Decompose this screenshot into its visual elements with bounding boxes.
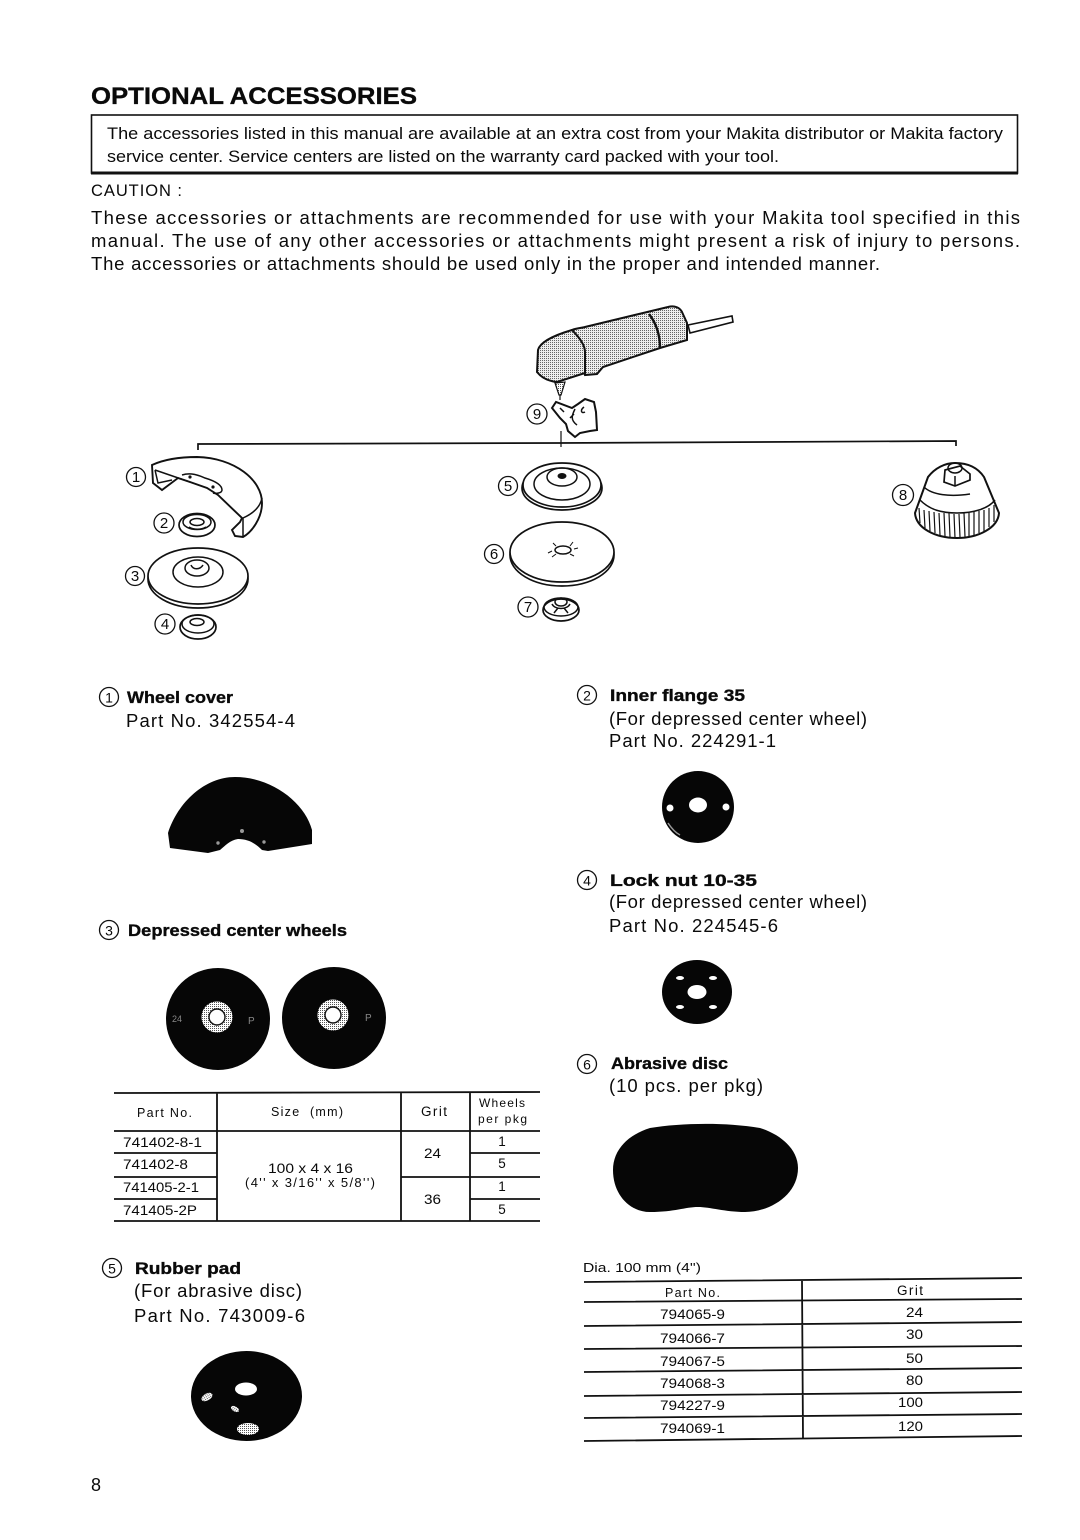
caution text — [91, 207, 1020, 274]
part 8: wire cup brush: 8 — [899, 487, 907, 504]
part 7: lock nut: 7 — [524, 599, 532, 616]
item: rubber pad: Rubber pad — [135, 1260, 241, 1278]
photo: inner flange — [662, 771, 734, 843]
photo: depressed center wheels: P — [365, 1013, 372, 1024]
part 6: abrasive disc: 6 — [490, 546, 498, 563]
marker 6 — [578, 1054, 596, 1074]
caution heading: CAUTION : — [91, 182, 182, 200]
notice box — [91, 115, 1018, 173]
table: abrasive discs: 794066-7 — [660, 1331, 725, 1346]
icon: angle grinder tool — [537, 306, 733, 400]
marker 3 — [100, 920, 118, 940]
item: abrasive disc — [578, 1054, 763, 1096]
table: depressed center wheels: 741405-2P — [123, 1203, 197, 1218]
item: inner flange: (For depressed center wheel) — [609, 708, 867, 729]
table: abrasive discs: 30 — [906, 1326, 923, 1342]
table: abrasive discs: 794069-1 — [660, 1421, 725, 1436]
photo: depressed center wheels — [166, 967, 386, 1070]
table: depressed center wheels: 1 — [498, 1134, 506, 1149]
table: depressed center wheels: 36 — [424, 1191, 441, 1207]
marker 4: 4 — [583, 872, 591, 888]
table: depressed center wheels: Part No. — [137, 1106, 192, 1120]
table: abrasive discs — [584, 1278, 1022, 1441]
part 9: flange piece: 9 — [533, 406, 541, 423]
table: depressed center wheels: 1 — [498, 1179, 506, 1194]
table: abrasive discs: 794065-9 — [660, 1307, 725, 1322]
item: inner flange: Part No. 224291-1 — [609, 730, 776, 751]
marker 3: 3 — [105, 922, 113, 938]
item: inner flange — [578, 686, 867, 751]
item: abrasive disc: Abrasive disc — [611, 1055, 728, 1073]
part 3: depressed center wheel: 3 — [131, 568, 139, 585]
item: wheel cover — [100, 688, 295, 731]
photo: depressed center wheels: 24 — [172, 1014, 182, 1024]
item: rubber pad — [102, 1258, 305, 1326]
table: depressed center wheels: 100 x 4 x 16 — [268, 1161, 353, 1176]
item: depressed center wheels: Depressed center wheels — [128, 922, 347, 940]
item: wheel cover: Wheel cover — [127, 689, 234, 707]
marker 5: 5 — [108, 1260, 116, 1276]
notice box: service center. Service centers are listed on the warranty card packed with your tool. — [107, 147, 779, 166]
photo: rubber pad — [191, 1351, 302, 1441]
table: depressed center wheels: 741402-8-1 — [123, 1135, 202, 1150]
part 6: abrasive disc — [484, 522, 614, 586]
connector line — [198, 431, 956, 450]
photo: lock nut — [662, 960, 732, 1024]
marker 1 — [100, 688, 118, 706]
photo: wheel cover — [168, 777, 312, 853]
table: depressed center wheels: per pkg — [478, 1112, 527, 1126]
table: depressed center wheels: Grit — [421, 1104, 447, 1119]
label: disc diameter: Dia. 100 mm (4'') — [583, 1261, 701, 1275]
table: abrasive discs: 50 — [906, 1350, 923, 1366]
part 5: rubber pad — [498, 463, 602, 510]
table: abrasive discs: 120 — [898, 1418, 923, 1434]
marker 2: 2 — [583, 688, 591, 704]
item: lock nut — [578, 870, 867, 936]
item: wheel cover: Part No. 342554-4 — [126, 710, 295, 731]
notice box: The accessories listed in this manual are available at an extra cost from your Makita distributor or Makita factory — [107, 124, 1004, 143]
part 3: depressed center wheel — [126, 548, 248, 608]
table: abrasive discs: 794068-3 — [660, 1376, 725, 1391]
marker 2 — [578, 686, 596, 704]
table: abrasive discs: Part No. — [665, 1286, 720, 1300]
item: rubber pad: Part No. 743009-6 — [134, 1305, 305, 1326]
part 9: flange piece — [527, 399, 597, 437]
title: OPTIONAL ACCESSORIES — [91, 83, 417, 110]
part 1: wheel cover: 1 — [132, 469, 140, 486]
table: depressed center wheels: (4'' x 3/16'' x 5/8'') — [245, 1175, 375, 1190]
photo: abrasive discs — [613, 1124, 798, 1212]
table: depressed center wheels: Size (mm) — [271, 1105, 343, 1119]
page number: 8 — [91, 1475, 101, 1495]
photo: depressed center wheels: P — [248, 1016, 255, 1027]
exploded parts diagram — [126, 306, 999, 639]
part 2: inner flange — [154, 513, 215, 536]
table: abrasive discs: 24 — [906, 1304, 923, 1320]
table: depressed center wheels: 24 — [424, 1145, 441, 1161]
marker 1: 1 — [105, 690, 113, 706]
table: depressed center wheels: 741405-2-1 — [123, 1180, 199, 1195]
table: abrasive discs: 80 — [906, 1372, 923, 1388]
part 2: inner flange: 2 — [160, 515, 168, 532]
item: lock nut: Part No. 224545-6 — [609, 915, 778, 936]
table: depressed center wheels: 5 — [498, 1202, 506, 1217]
part 4: lock nut — [155, 614, 216, 639]
marker 4 — [578, 870, 596, 890]
marker 6: 6 — [583, 1056, 591, 1072]
part 8: wire cup brush — [892, 463, 999, 538]
part 1: wheel cover — [126, 457, 262, 537]
table: depressed center wheels: Wheels — [479, 1096, 525, 1110]
table: abrasive discs: 794227-9 — [660, 1398, 725, 1413]
caution text: The accessories or attachments should be used only in the proper and intended manner. — [91, 253, 880, 274]
part 4: lock nut: 4 — [161, 616, 169, 633]
item: rubber pad: (For abrasive disc) — [134, 1280, 302, 1301]
item: inner flange: Inner flange 35 — [610, 687, 745, 705]
item: abrasive disc: (10 pcs. per pkg) — [609, 1075, 763, 1096]
table: depressed center wheels: 741402-8 — [123, 1157, 188, 1172]
marker 5 — [102, 1258, 122, 1278]
part 5: rubber pad: 5 — [504, 478, 512, 495]
table: abrasive discs: 100 — [898, 1394, 923, 1410]
table: depressed center wheels: 5 — [498, 1156, 506, 1171]
table: abrasive discs: 794067-5 — [660, 1354, 725, 1369]
item: lock nut: (For depressed center wheel) — [609, 891, 867, 912]
caution text: manual. The use of any other accessories or attachments might present a risk of injury to persons. — [91, 230, 1020, 251]
item: lock nut: Lock nut 10-35 — [610, 872, 757, 890]
caution text: These accessories or attachments are recommended for use with your Makita tool specified in this — [91, 207, 1020, 228]
part 7: lock nut — [518, 597, 579, 621]
table: abrasive discs: Grit — [897, 1283, 923, 1298]
table: depressed center wheels — [114, 1092, 540, 1221]
